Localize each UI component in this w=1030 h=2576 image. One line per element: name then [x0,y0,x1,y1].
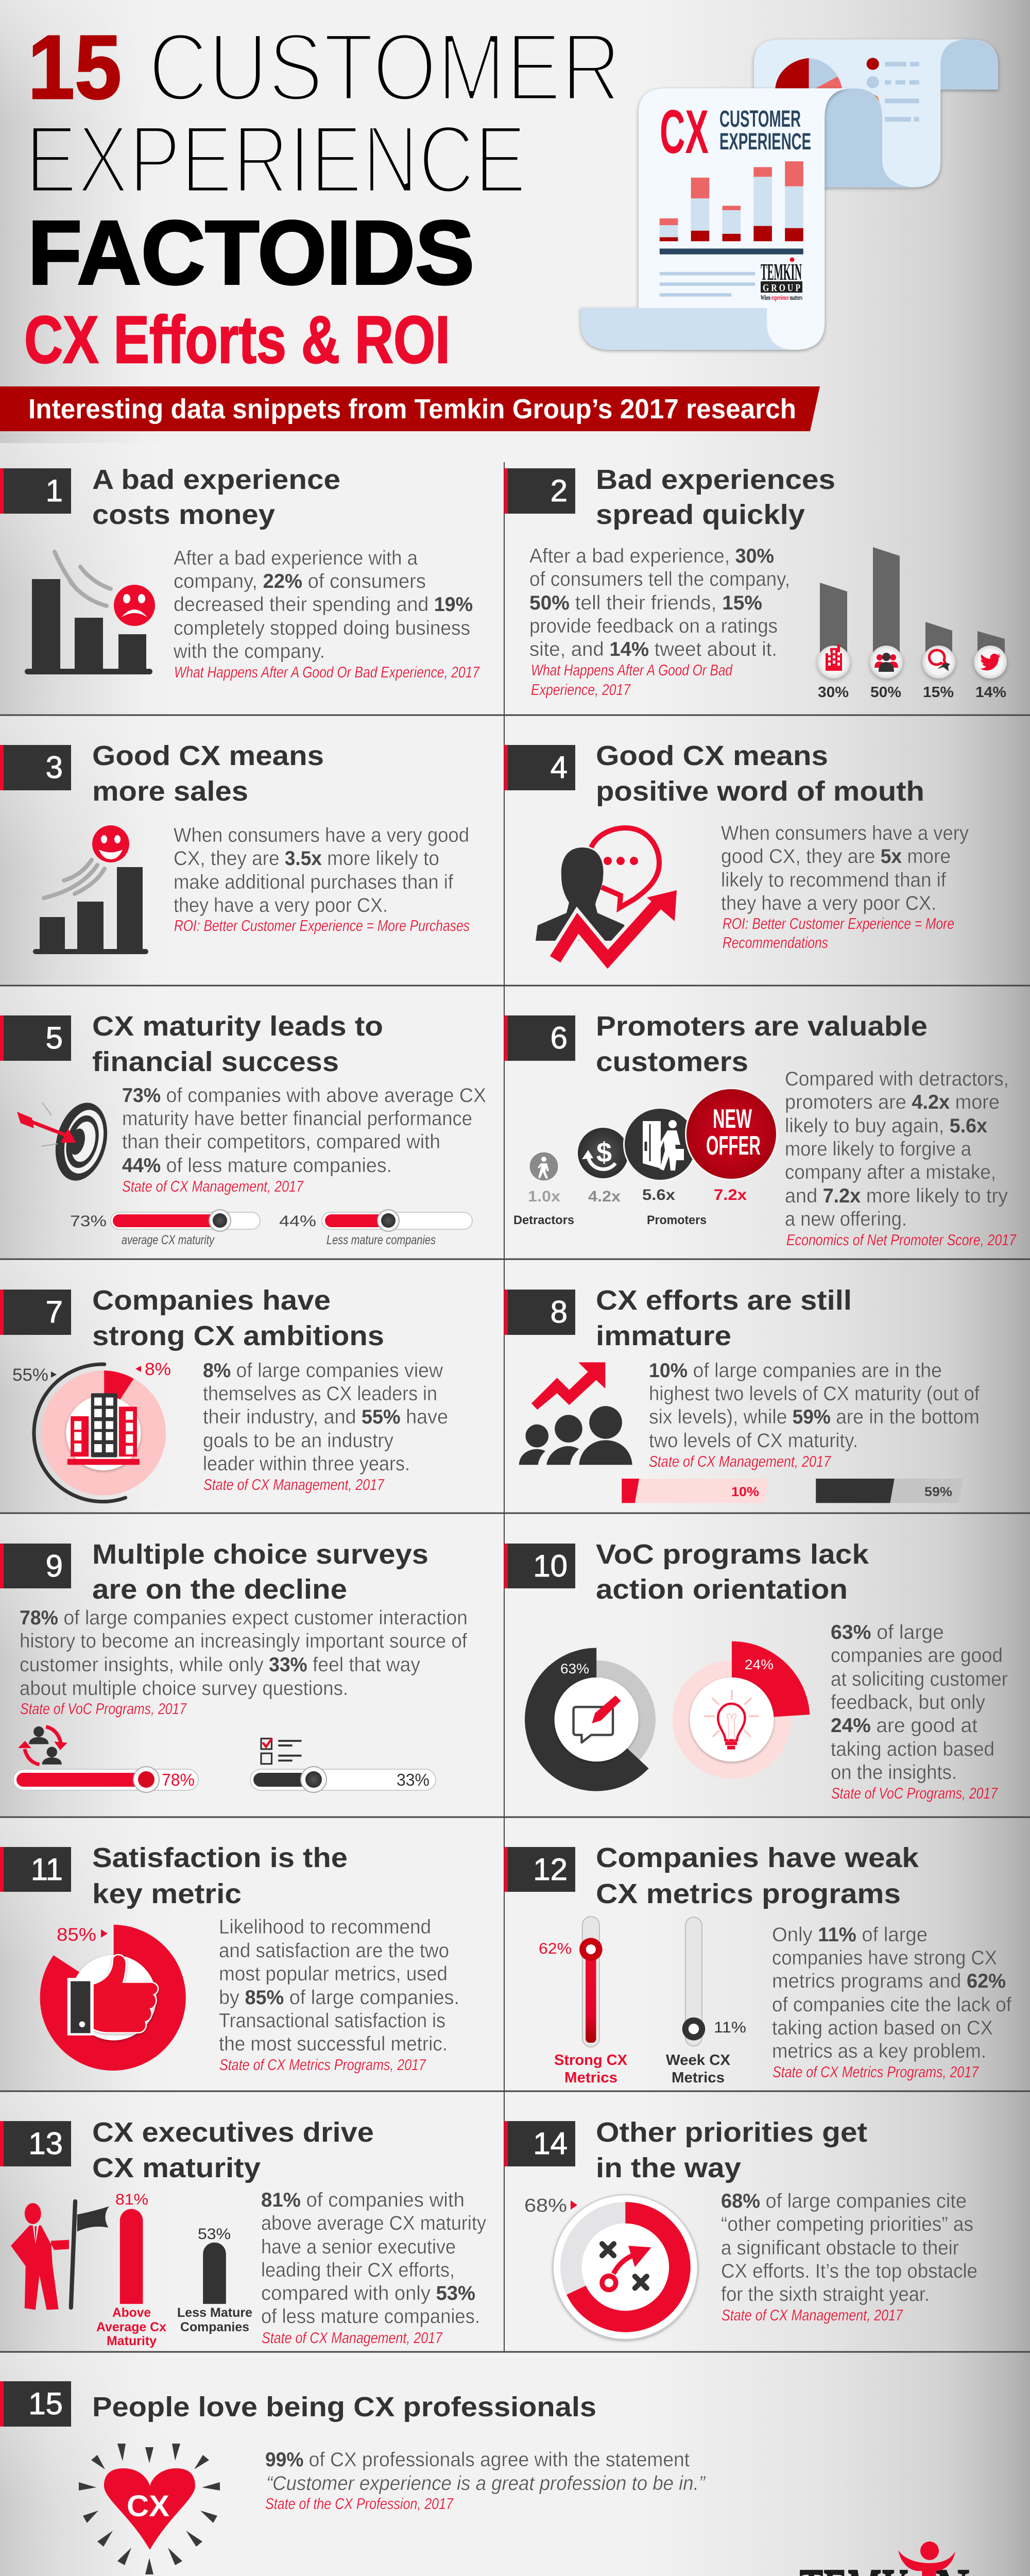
panel 2 [504,464,1007,701]
heading 6: customers [596,1046,748,1077]
icon: people with rising arrow [519,1362,632,1465]
text 15: State of the CX Profession, 2017 [265,2495,454,2513]
heading 7 [92,1285,384,1351]
chart: senior executive bars: Companies [180,2320,249,2334]
icon: executive with flag [11,2201,109,2310]
text 4: they have a very poor CX. [721,892,936,914]
slider: average CX maturity: average CX maturity [122,1233,215,1247]
report heading: CX [660,97,709,166]
text 1: completely stopped doing business [174,617,470,639]
chart: where consumers share: 30% [818,684,849,701]
chart: taking action donut [673,1641,810,1778]
text 2: What Happens After A Good Or Bad [531,661,733,679]
slider: less mature companies: Less mature companies [327,1233,436,1247]
badge 8 [504,1290,575,1335]
title: FACTOIDS [28,202,474,303]
text 13: leading their CX efforts, [261,2259,455,2281]
icon: new offer: OFFER [706,1131,761,1161]
text 10 [831,1621,1008,1802]
heading 1: A bad experience [92,464,340,495]
heading 7: strong CX ambitions [92,1320,384,1351]
text 6: likely to buy again, 5.6x [785,1115,988,1137]
chart: where consumers share [817,547,1007,701]
panel 15 [0,2381,706,2574]
chart: where consumers share: 50% [870,684,901,701]
gauge: strong CX metrics: 62% [539,1940,572,1957]
badge 12 [504,1847,575,1892]
text 10: 63% of large [831,1621,944,1643]
text 1: company, 22% of consumers [174,570,426,592]
panel 6 [504,1011,1017,1249]
text 10: on the insights. [831,1761,957,1784]
heading 8 [596,1285,852,1351]
heading 3: Good CX means [92,740,324,771]
text 14: for the sixth straight year. [721,2283,930,2306]
badge 15: 15 [28,2386,63,2421]
banner [0,386,820,431]
slider: less mature companies: 44% [279,1213,316,1230]
chart: senior executive bars: Maturity [107,2334,157,2348]
text: TEMKIN [761,259,802,285]
text 9 [20,1607,468,1718]
heading 11 [92,1842,348,1909]
text 3: ROI: Better Customer Experience = More Purchases [174,917,470,935]
text 12: Only 11% of large [772,1924,928,1946]
badge 6 [504,1015,575,1061]
badge 7 [0,1290,71,1335]
text 5 [122,1084,486,1195]
heading 9: are on the decline [92,1574,347,1605]
icon: detractor [529,1152,558,1181]
title: CUSTOMER [148,13,621,121]
icon: rising bars with smiling face [33,825,148,954]
badge 9: 9 [46,1549,63,1583]
heading 12: CX metrics programs [596,1878,901,1909]
chart: leaders donut with building [12,1360,171,1502]
text 2: of consumers tell the company, [529,568,790,590]
text 10: feedback, but only [831,1691,986,1714]
text 1: with the company. [173,640,325,663]
icon: customer interaction cycle [18,1726,67,1765]
badge 11: 11 [31,1852,63,1887]
text 7: 8% of large companies view [203,1360,443,1382]
text 4: Recommendations [723,934,828,952]
logo: Temkin Group [799,2541,970,2576]
text 10: companies are good [831,1645,1003,1667]
text 1: What Happens After A Good Or Bad Experience, 2017 [174,663,480,681]
text 11: and satisfaction are the two [219,1940,449,1962]
banner: Interesting data snippets from Temkin Group’s 2017 research [28,394,796,425]
chart: maturity bars: 59% [924,1485,952,1499]
icon: person with speech bubble and rising arrow [536,828,677,959]
heading 13: CX executives drive [92,2117,374,2148]
chart: competing priorities donut: 68% [524,2195,567,2216]
heading 11: key metric [92,1878,242,1909]
promoter values: 7.2x [714,1187,747,1204]
text 15 [265,2449,706,2513]
badge 9 [0,1544,71,1588]
text 13: State of CX Management, 2017 [262,2329,443,2347]
text 12: metrics as a key problem. [772,2040,986,2062]
text 8: six levels), while 59% are in the bottom [649,1406,980,1428]
report small logo [761,258,802,302]
heading 5: CX maturity leads to [92,1011,383,1042]
text 8: 10% of large companies are in the [649,1360,942,1382]
panel 9 [0,1539,468,1792]
text 11: Transactional satisfaction is [219,2010,445,2032]
text 7 [203,1360,448,1494]
text 14: a significant obstacle to their [721,2237,959,2259]
badge 10 [504,1544,575,1588]
text 5: than their competitors, compared with [122,1131,440,1153]
text 6: promoters are 4.2x more [785,1091,1000,1113]
panel 8 [504,1285,980,1503]
text 11: State of CX Metrics Programs, 2017 [219,2056,426,2074]
text 12: taking action based on CX [772,2017,993,2039]
slider: interaction history: 78% [162,1770,195,1789]
icon: report scrolls [581,40,998,350]
text 5: State of CX Management, 2017 [122,1177,304,1195]
panel 13 [0,2117,487,2348]
panel 5 [0,1011,486,1247]
gauge: strong CX metrics: Metrics [564,2070,617,2086]
promoter values: 4.2x [588,1188,621,1205]
text 3: CX, they are 3.5x more likely to [174,848,439,870]
text 10: 24% are good at [831,1715,977,1737]
panel 3 [0,740,470,954]
chart: maturity bars: 10% [731,1485,759,1499]
text 13: 81% of companies with [261,2189,465,2211]
promoter values: 1.0x [528,1188,560,1205]
badge 14 [504,2121,575,2166]
text 11: most popular metrics, used [219,1963,448,1985]
chart: senior executive bars: Less Mature [177,2306,252,2320]
chart: senior executive bars: 81% [115,2191,148,2208]
heading 10 [596,1539,869,1605]
heading 12: Companies have weak [596,1842,919,1873]
heading 2 [596,464,835,530]
heading 1: costs money [92,499,275,530]
panel 12 [504,1842,1011,2086]
badge 2: 2 [551,473,568,508]
heading 1 [92,464,340,530]
heading 5: financial success [92,1046,339,1077]
panel 1 [0,464,480,681]
heading 3: more sales [92,776,248,807]
chart: competing priorities donut [524,2195,698,2340]
chart: taking action donut: 24% [745,1657,774,1672]
text 14: 68% of large companies cite [721,2190,967,2212]
chart: thumbs-up donut [40,1925,186,2071]
icon: repeat purchase: $ [596,1137,612,1168]
text 1: decreased their spending and 19% [174,594,473,616]
text 6 [785,1068,1017,1249]
heading 14: in the way [596,2153,741,2183]
text 3 [174,824,470,935]
heading 4: Good CX means [596,740,828,771]
heading 2: spread quickly [596,499,805,530]
panel 14 [504,2117,977,2340]
text 4: ROI: Better Customer Experience = More [723,914,954,933]
text 9: 78% of large companies expect customer interaction [20,1607,468,1629]
text 8: State of CX Management, 2017 [649,1452,831,1470]
icon: target with arrow [17,1097,115,1186]
heading 2: Bad experiences [596,464,835,495]
report chart bars [660,161,803,297]
icon: CX heart with rays: CX [127,2489,169,2523]
heading 12 [596,1842,919,1909]
text 2: site, and 14% tweet about it. [529,638,777,660]
heading 14 [596,2117,867,2183]
chart: thumbs-up donut: 85% [57,1925,96,1945]
report heading [660,97,811,166]
heading 14: Other priorities get [596,2117,867,2148]
title: 15 [28,17,122,118]
badge 3 [0,745,71,790]
text 4: likely to recommend than if [721,869,946,891]
text 13: of less mature companies. [261,2306,480,2328]
text 14: CX efforts. It’s the top obstacle [721,2260,977,2282]
gauge: strong CX metrics [539,1917,628,2086]
text 12: of companies cite the lack of [772,1994,1011,2016]
text 13: have a senior executive [261,2236,456,2258]
report small logo: G R O U P [763,282,800,294]
text 13 [261,2189,487,2347]
text 14: State of CX Management, 2017 [722,2306,903,2324]
text 6: Compared with detractors, [785,1068,1009,1090]
badge 10: 10 [533,1549,568,1583]
badge 2 [504,468,575,514]
text 2 [529,545,790,699]
chart: leaders donut with building: 8% [145,1360,171,1379]
gauge: weak CX metrics [666,1917,746,2086]
report heading: CUSTOMER [719,106,801,132]
text 14: “other competing priorities” as [721,2213,973,2235]
badge 12: 12 [533,1852,568,1887]
heading 8: immature [596,1320,731,1351]
heading 15: People love being CX professionals [92,2392,596,2422]
heading 6: Promoters are valuable [596,1011,928,1042]
heading 7: Companies have [92,1285,331,1316]
text 10: at soliciting customer [831,1668,1008,1690]
text 6: company after a mistake, [785,1161,996,1183]
text 11: Likelihood to recommend [219,1916,431,1938]
text 7: State of CX Management, 2017 [203,1476,385,1494]
chart: maturity bars [622,1479,963,1503]
text 11 [219,1916,459,2074]
text 3: When consumers have a very good [174,824,469,846]
badge 11 [0,1847,71,1892]
icon: new offer: NEW [713,1104,752,1134]
icon: checklist [261,1738,302,1764]
chart: senior executive bars: Above [112,2306,151,2320]
report small logo: When experience matters [761,294,802,302]
slider: average CX maturity [70,1210,260,1247]
heading 4: positive word of mouth [596,776,924,807]
badge 13 [0,2121,71,2166]
text 4: good CX, they are 5x more [721,845,951,868]
panel 4 [504,740,969,959]
text 8 [649,1360,980,1470]
panel 7 [0,1285,448,1502]
text 15: 99% of CX professionals agree with the statement [265,2449,690,2471]
badge 3: 3 [46,750,63,785]
badge 6: 6 [551,1021,568,1055]
chart: where consumers share: 14% [975,684,1006,701]
slider: multiple choice questions: 33% [397,1770,430,1789]
heading 4 [596,740,924,807]
heading 9 [92,1539,428,1605]
chart: senior executive bars [96,2191,252,2348]
gauge: weak CX metrics: Week CX [666,2052,731,2069]
text 12 [772,1924,1011,2081]
slider: average CX maturity: 73% [70,1213,107,1230]
text 5: 73% of companies with above average CX [122,1084,486,1107]
text 3: make additional purchases than if [174,871,453,893]
badge 5: 5 [46,1021,63,1055]
text 7: leader within three years. [203,1453,410,1475]
text 10: taking action based [831,1738,994,1760]
grid dividers [0,462,1030,2352]
text 11: the most successful metric. [219,2033,448,2055]
text 6: and 7.2x more likely to try [785,1185,1008,1207]
text 11: by 85% of large companies. [219,1987,459,2009]
text 8: highest two levels of CX maturity (out of [649,1383,980,1405]
text 2: 50% tell their friends, 15% [529,592,762,614]
badge 5 [0,1015,71,1061]
text 1 [173,547,480,681]
heading 10: action orientation [596,1574,848,1605]
promoter values: 5.6x [642,1187,675,1204]
promoter values: Promoters [647,1213,707,1227]
badge 15 [0,2381,71,2427]
text 12: metrics programs and 62% [772,1970,1006,1992]
text 6: more likely to forgive a [785,1138,972,1160]
badge 14: 14 [533,2126,568,2161]
icon: returning customer through door [623,1107,697,1181]
front scroll [581,88,853,350]
text 7: goals to be an industry [203,1430,394,1452]
chart: where consumers share: 15% [923,684,954,701]
text 2: provide feedback on a ratings [529,615,778,637]
text 4: When consumers have a very [721,822,969,844]
text 9: about multiple choice survey questions. [20,1677,348,1700]
text 15: “Customer experience is a great profession to be in.” [266,2472,706,2495]
heading 10: VoC programs lack [596,1539,869,1570]
text 13: above average CX maturity [261,2212,487,2234]
heading 13: CX maturity [92,2153,261,2183]
text 5: maturity have better financial performance [122,1108,472,1130]
badge 1: 1 [46,473,63,508]
text 7: themselves as CX leaders in [203,1383,437,1405]
panel 11 [0,1842,459,2074]
icon: CX heart with rays [79,2444,220,2574]
heading 9: Multiple choice surveys [92,1539,428,1570]
text 12: companies have strong CX [772,1947,997,1969]
heading 8: CX efforts are still [596,1285,852,1316]
text 14 [721,2190,977,2324]
badge 4: 4 [551,750,568,785]
back scroll [754,40,998,189]
heading 5 [92,1011,383,1077]
chart: senior executive bars: Average Cx [96,2320,166,2334]
title [25,13,621,303]
chart: soliciting feedback donut: 63% [560,1661,589,1676]
gauge: weak CX metrics: 11% [714,2019,746,2036]
slider: interaction history [13,1767,198,1792]
heading 6 [596,1011,928,1077]
text 1: After a bad experience with a [174,547,418,569]
text 9: customer insights, while only 33% feel that way [20,1654,421,1676]
text 2: Experience, 2017 [531,681,631,699]
chart: soliciting feedback donut [525,1648,656,1791]
gauge: strong CX metrics: Strong CX [554,2052,628,2069]
panel 10 [504,1539,1008,1802]
promoter values: Detractors [513,1213,574,1227]
badge 13: 13 [28,2126,63,2161]
heading 3 [92,740,324,807]
chart: senior executive bars: 53% [198,2226,231,2243]
text 9: history to become an increasingly important source of [20,1630,467,1652]
subtitle: CX Efforts & ROI [24,302,450,377]
badge 4 [504,745,575,790]
heading 13 [92,2117,374,2183]
gauge: weak CX metrics: Metrics [672,2070,725,2086]
text 3: they have a very poor CX. [174,894,388,917]
report heading: EXPERIENCE [719,128,811,155]
chart: leaders donut with building: 55% [12,1365,48,1385]
badge 7: 7 [46,1295,63,1329]
icon: repeat purchase [576,1126,630,1180]
slider: multiple choice questions [250,1767,436,1792]
badge 8: 8 [551,1295,568,1329]
text 9: State of VoC Programs, 2017 [20,1700,187,1718]
text 12: State of CX Metrics Programs, 2017 [772,2063,979,2081]
icon: falling bars with sad face [25,552,155,674]
text 2: After a bad experience, 30% [529,545,774,567]
title: EXPERIENCE [25,105,526,213]
text 6: a new offering. [785,1208,907,1230]
badge 1 [0,468,71,514]
icon: new offer [685,1088,778,1180]
promoter values [513,1187,747,1227]
slider: less mature companies [279,1210,472,1247]
text 5: 44% of less mature companies. [122,1155,392,1177]
text 13: compared with only 53% [261,2282,475,2304]
text 4 [721,822,969,952]
text 8: two levels of CX maturity. [649,1430,858,1452]
text 7: their industry, and 55% have [203,1406,448,1428]
heading 11: Satisfaction is the [92,1842,348,1873]
